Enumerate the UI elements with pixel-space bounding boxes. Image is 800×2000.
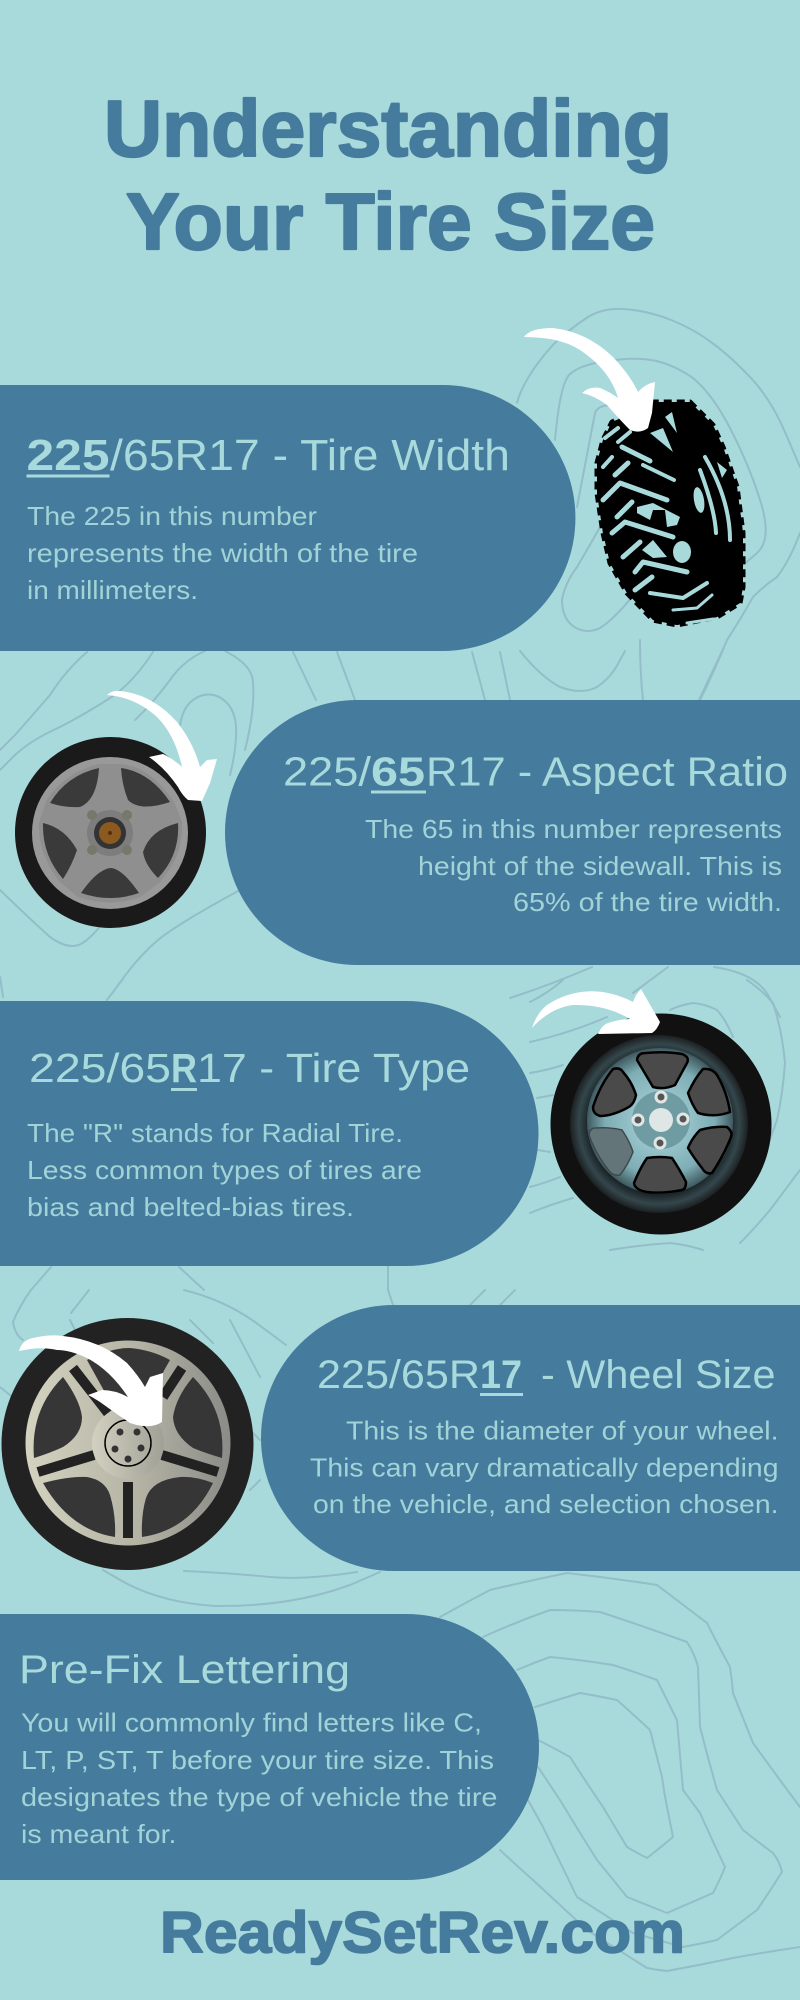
body text: wheel size (310, 1416, 778, 1519)
icon: teal six-spoke wheel (550, 1014, 772, 1234)
heading: tire type (29, 1045, 470, 1091)
body text: pre-fix lettering (21, 1708, 498, 1849)
body text: wheel size: on the vehicle, and selection chosen. (313, 1489, 778, 1519)
body text: tire width: The 225 in this number (27, 501, 317, 531)
panel: tire type (0, 1001, 538, 1266)
body text: tire type: The "R" stands for Radial Tire. (27, 1118, 403, 1148)
arrow: to tire tread (524, 328, 655, 432)
icon: five-spoke alloy wheel (2, 1318, 254, 1570)
heading: tire type: R (171, 1045, 197, 1091)
title (104, 84, 672, 266)
title: Understanding (104, 84, 672, 173)
body text: tire width: represents the width of the tire (27, 538, 418, 568)
body text: pre-fix lettering: designates the type of vehicle the tire (21, 1782, 498, 1812)
footer: website name: ReadySetRev.com (160, 1900, 685, 1966)
arrow: to teal wheel (532, 989, 660, 1034)
body text: tire width (27, 501, 418, 605)
heading: pre-fix lettering: Pre-Fix Lettering (19, 1648, 350, 1692)
arrow: to alloy wheel (19, 1335, 163, 1426)
body text: pre-fix lettering: LT, P, ST, T before your tire size. This (21, 1745, 494, 1775)
body text: pre-fix lettering: You will commonly find letters like C, (21, 1708, 482, 1738)
body text: aspect ratio: height of the sidewall. This is (418, 851, 782, 881)
heading: wheel size: - Wheel Size (541, 1353, 776, 1397)
arrow: to silver wheel (107, 691, 217, 801)
body text: aspect ratio (365, 814, 782, 917)
body text: tire type: bias and belted-bias tires. (27, 1192, 354, 1222)
heading: aspect ratio: 65 (371, 748, 425, 794)
body text: tire width: in millimeters. (27, 575, 198, 605)
body text: pre-fix lettering: is meant for. (21, 1819, 176, 1849)
heading: wheel size: 17 (480, 1353, 522, 1397)
body text: tire type (27, 1118, 422, 1222)
title: Your Tire Size (126, 177, 655, 266)
body text: aspect ratio: 65% of the tire width. (513, 887, 782, 917)
panel: tire width (0, 385, 575, 651)
icon: silver five-spoke wheel (15, 737, 206, 928)
heading: tire width: /65R17 - Tire Width (110, 431, 510, 480)
panel: pre-fix lettering (0, 1614, 539, 1880)
heading: wheel size (317, 1353, 776, 1397)
heading: wheel size: 225/65R (317, 1353, 480, 1397)
heading: aspect ratio: 225/ (283, 748, 372, 794)
heading: tire width: 225 (26, 431, 109, 480)
heading: tire type: 225/65 (29, 1045, 171, 1091)
heading: aspect ratio (283, 748, 788, 794)
body text: wheel size: This can vary dramatically depending (310, 1452, 778, 1482)
heading: tire type: 17 - Tire Type (197, 1045, 470, 1091)
panel: aspect ratio (225, 700, 800, 965)
icon: knobby tire tread (597, 402, 743, 625)
heading: aspect ratio: R17 - Aspect Ratio (426, 748, 788, 794)
body text: wheel size: This is the diameter of your wheel. (346, 1416, 778, 1446)
body text: tire type: Less common types of tires are (27, 1155, 422, 1185)
body text: aspect ratio: The 65 in this number represents (365, 814, 782, 844)
panel: wheel size (261, 1305, 800, 1571)
